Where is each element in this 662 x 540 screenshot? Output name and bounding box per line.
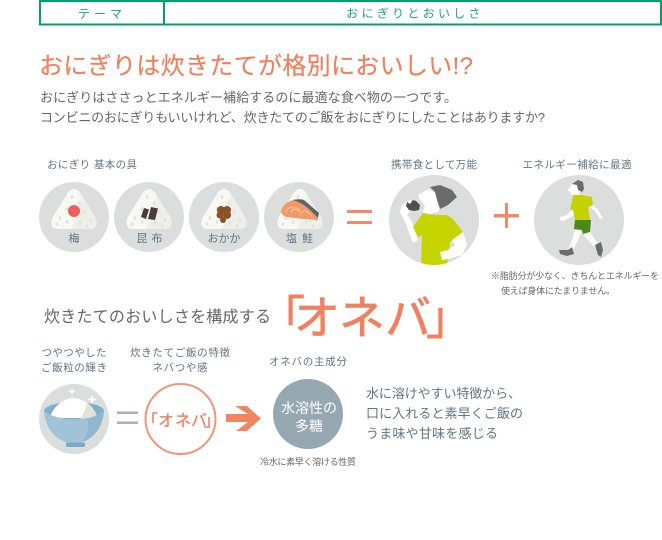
icon: okaka onigiri: おかか [208,232,240,245]
description: 水に溶けやすい特徴から、 [366,386,521,401]
icon: walking person [534,175,624,265]
label: rice shine: つやつやした [42,347,106,359]
description: うま味や甘味を感じる [366,426,498,441]
ring: Oneba [142,384,220,454]
intro text: コンビニのおにぎりもいいけれど、炊きたてのご飯をおにぎりにしたことはありますか? [40,110,545,125]
note [491,270,659,296]
heading: composition of freshly cooked flavour: 炊きたてのおいしさを構成する [44,308,271,326]
intro text: おにぎりはささっとエネルギー補給するのに最適な食べ物の一つです。 [40,90,457,105]
label: portable food: 携帯食として万能 [391,158,478,171]
icon: salted salmon onigiri: 塩鮭 [286,231,313,245]
icon: kombu onigiri [114,182,184,252]
equals sign [347,210,372,224]
theme header bar [40,1,661,25]
icon: kombu onigiri: 昆布 [136,232,162,245]
icon: rice bowl [39,384,109,454]
note: ※脂肪分が少なく、きちんとエネルギーを [491,270,659,281]
label: main component: オネバの主成分 [269,356,348,368]
circle: water-soluble polysaccharide: 多糖 [295,418,323,434]
theme header bar: おにぎりとおいしさ [346,6,484,20]
theme header bar: テーマ [78,7,126,21]
icon: salted salmon onigiri [264,182,334,252]
ring: Oneba: 「オネバ」 [142,412,220,430]
icon: ume onigiri [39,182,109,252]
intro text [40,90,545,125]
description: 口に入れると素早くご飯の [366,406,523,421]
title: おにぎりは炊きたてが格別においしい!? [39,53,473,80]
circle: water-soluble polysaccharide [273,379,343,449]
heading: Oneba: 「オネバ」 [259,292,472,344]
circle: water-soluble polysaccharide: 水溶性の [281,400,337,416]
caption: dissolves in cold water: 冷水に素早く溶ける性質 [260,456,356,467]
arrow [226,406,261,431]
label: rice shine: ご飯粒の輝き [41,361,107,374]
equals sign: grey [117,412,138,424]
plus sign [494,203,519,228]
label: rice feature [130,346,230,374]
icon: person eating onigiri [389,175,479,266]
label: energy supply: エネルギー補給に最適 [522,158,632,171]
label: rice feature: 炊きたてご飯の特徴 [130,346,230,359]
icon: ume onigiri: 梅 [68,231,80,245]
note: 使えば身体にたまりません。 [501,285,615,296]
description [366,386,523,441]
label: rice feature: ネバつや感 [152,361,208,374]
icon: okaka onigiri [189,182,259,252]
heading: basic fillings: おにぎり 基本の具 [47,158,138,171]
label: rice shine [41,347,107,374]
